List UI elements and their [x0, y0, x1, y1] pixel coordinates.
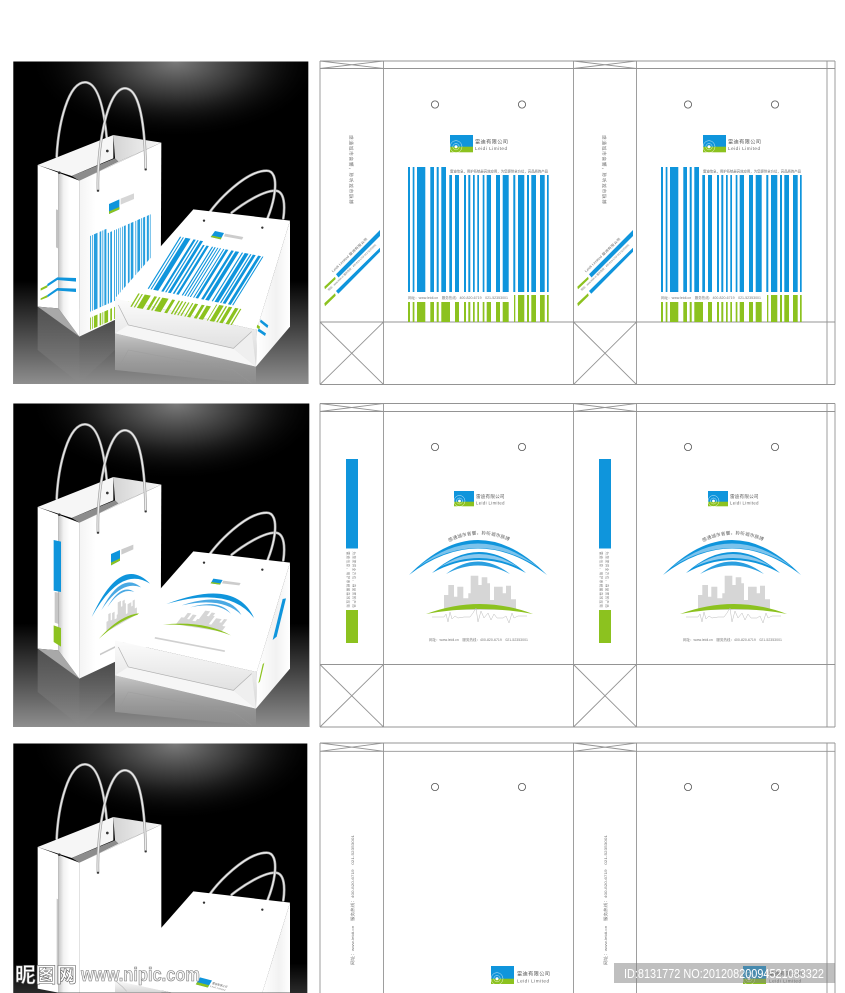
dark studio background — [13, 62, 308, 384]
face artwork: first — [409, 491, 547, 642]
green ground arc — [426, 604, 533, 614]
logo: second face: 雷迪有限公司 — [728, 138, 761, 146]
panel: barcode bag dieline — [320, 61, 835, 384]
lying bag body — [115, 551, 290, 709]
side artwork: blue and green bars — [54, 540, 61, 647]
bags: barcode design — [38, 82, 290, 384]
bags: skyline design — [38, 424, 290, 726]
logo: second face — [703, 135, 761, 153]
gusset contact text: first: 网址：www.leidi.cn 服务热线：400-820-6719 021-52353001 — [349, 834, 355, 965]
standing bag front handle — [98, 770, 146, 873]
dieline fold lines — [320, 743, 835, 993]
standing bag front handle — [98, 430, 146, 533]
contact line: 网址：www.leidi.cn 服务热线：400-820-6719 021-52353001 — [683, 637, 782, 642]
panel: skyline bag mockup — [13, 404, 309, 727]
gusset artwork: first: 网址：www.leidi.cn 服务热线：400-820-6719 021-52353001 — [327, 243, 377, 292]
gusset artwork: first — [324, 135, 380, 306]
panel: plain bag mockup — [13, 744, 307, 993]
watermark: nipic site: 昵图网 — [15, 964, 77, 987]
watermark: nipic site: www.nipic.com — [80, 965, 200, 986]
logo: first face: Leidi Limited — [517, 978, 549, 984]
standing bag — [38, 135, 161, 337]
logo: second face: Leidi Limited — [728, 146, 760, 151]
gusset contact text: second: 网址：www.leidi.cn 服务热线：400-820-6719 021-52353001 — [602, 834, 608, 965]
logo — [454, 491, 505, 506]
logo on lying bag: 雷迪有限公司 — [211, 981, 229, 989]
logo — [708, 491, 759, 506]
face artwork: second — [663, 491, 801, 642]
bag reflections — [38, 648, 256, 724]
contact line on standing bag — [100, 642, 124, 656]
logo: 雷迪有限公司 — [476, 493, 505, 500]
gusset artwork: first: Leidi Limited 雷迪有限公司 — [330, 236, 368, 273]
logo on lying bag — [211, 579, 241, 585]
punch holes — [431, 783, 779, 791]
logo: Leidi Limited — [730, 500, 759, 506]
logo: first face — [491, 966, 550, 985]
back handle — [57, 82, 107, 157]
skyline — [698, 576, 770, 610]
logo on lying bag — [196, 977, 229, 992]
gusset artwork: second: 网址：www.leidi.cn 服务热线：400-820-6719 021-52353001 — [580, 243, 630, 292]
logo on standing bag — [109, 193, 134, 214]
gusset bars: first: 为您提供全方位，高品质的产品 — [352, 552, 357, 608]
contact line: 网址：www.leidi.cn 服务热线：400-820-6719 021-52353001 — [429, 637, 528, 642]
dark studio background — [13, 744, 307, 993]
logo: 雷迪有限公司 — [730, 493, 759, 500]
dieline fold lines — [320, 61, 835, 384]
side stripes on lying bag — [257, 319, 268, 336]
logo: first face: 雷迪有限公司 — [475, 138, 508, 146]
logo: Leidi Limited — [476, 500, 505, 506]
logo on standing bag — [111, 545, 133, 565]
green ground arc — [680, 604, 787, 614]
standing bag — [38, 817, 161, 993]
panel: plain bag dieline — [320, 743, 835, 993]
gusset artwork: second — [577, 135, 633, 306]
barcode: first face: 网址：www.leidi.cn 服务热线：400-820-6719 021-52353001 — [408, 295, 508, 300]
lying bag handles — [204, 853, 284, 910]
front artwork: barcode on standing bag — [90, 209, 151, 330]
logo: first face: 雷迪有限公司 — [517, 970, 550, 978]
barcode: second face: 网址：www.leidi.cn 服务热线：400-820-6719 021-52353001 — [661, 295, 761, 300]
lying bag body — [115, 209, 290, 367]
sound wave — [432, 608, 527, 623]
side bars on lying bag — [258, 598, 286, 683]
gusset bars: second: 雷迪信息，用护系统最高效应用 — [599, 552, 604, 608]
contact line on lying bag — [155, 637, 225, 652]
panel: skyline bag dieline — [320, 403, 836, 728]
watermark: image id bar — [614, 963, 835, 983]
barcode: first face — [408, 167, 549, 322]
logo on lying bag: Leidi Limited — [209, 985, 227, 992]
green bars on lying bag — [130, 291, 241, 325]
eyelets on standing bag — [58, 492, 147, 534]
gusset artwork: second: 感通城市音響，聆听城市脉搏 — [600, 135, 608, 204]
standing bag front handle — [98, 88, 146, 191]
panel: barcode bag mockup — [13, 62, 308, 384]
punch holes — [431, 443, 779, 451]
bags: plain design — [38, 764, 290, 993]
skyline — [444, 576, 516, 610]
logo: second face — [743, 966, 802, 985]
sound wave — [686, 608, 781, 623]
eyelets on standing bag — [58, 150, 147, 192]
barcode: first face: 雷迪信息，用护系统最高效应用，为您提供全方位，高品质的产品 — [450, 168, 548, 174]
gusset bars: second — [599, 459, 611, 643]
slogan on arc: 感通城市音響，聆听城市脉搏 — [702, 530, 764, 542]
side artwork: diagonal stripes — [41, 209, 76, 300]
back handle — [57, 424, 107, 499]
slogan on arc: 感通城市音響，聆听城市脉搏 — [448, 530, 510, 542]
dark studio background — [13, 404, 309, 727]
gusset bars: second: 为您提供全方位，高品质的产品 — [605, 552, 610, 608]
watermark: nipic site — [15, 964, 200, 987]
front artwork: arcs and skyline on lying bag — [163, 594, 254, 636]
logo: second face: 雷迪有限公司 — [769, 970, 802, 978]
barcode: second face: 雷迪信息，用护系统最高效应用，为您提供全方位，高品质的产品 — [703, 168, 801, 174]
gusset bars: first: 雷迪信息，用护系统最高效应用 — [346, 552, 351, 608]
arcs — [663, 540, 801, 575]
logo: second face: Leidi Limited — [769, 978, 801, 984]
barcode: second face — [661, 167, 802, 322]
lying bag handles — [208, 511, 286, 562]
front artwork: arcs and skyline on standing bag — [92, 574, 150, 639]
gusset artwork: first: 感通城市音響，聆听城市脉搏 — [348, 135, 354, 204]
bag reflections — [38, 307, 256, 384]
dieline fold lines — [320, 404, 835, 727]
punch holes — [431, 101, 779, 108]
logo on lying bag — [211, 231, 243, 240]
gusset bars: first — [346, 459, 358, 643]
lying bag body — [115, 891, 290, 993]
logo: first face: Leidi Limited — [475, 146, 507, 151]
gusset artwork: second: Leidi Limited 雷迪有限公司 — [583, 236, 621, 273]
front artwork: barcode on lying bag — [148, 237, 265, 305]
logo: first face — [450, 135, 508, 153]
standing bag — [38, 477, 161, 679]
arcs — [409, 540, 547, 575]
eyelets on standing bag — [58, 832, 147, 874]
back handle — [57, 764, 107, 839]
lying bag handles — [208, 169, 286, 220]
